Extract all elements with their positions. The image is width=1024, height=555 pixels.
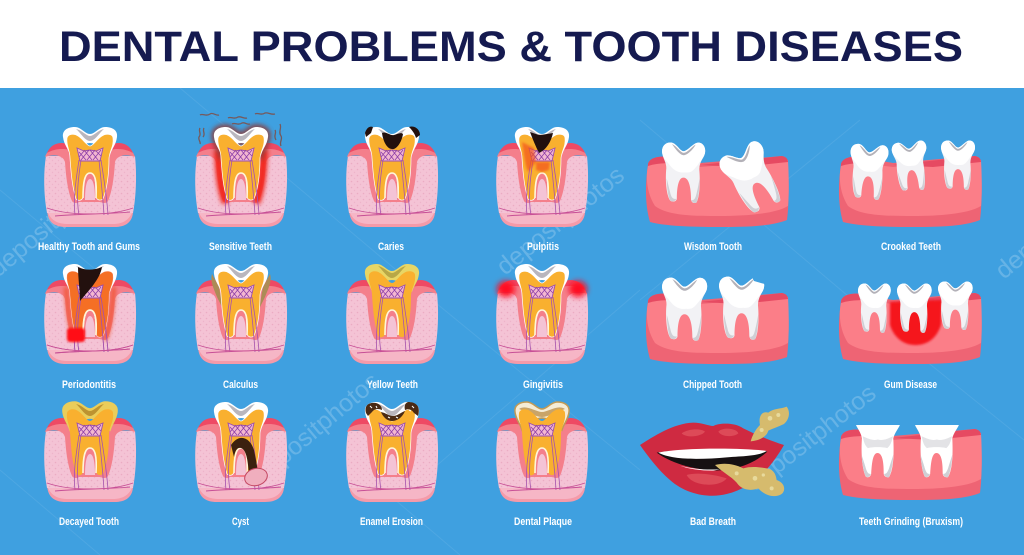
icon: cavity: [78, 267, 102, 301]
icon: mouth and teeth: [657, 449, 767, 471]
title: DENTAL PROBLEMS & TOOTH DISEASES: [59, 23, 963, 71]
icon: impacted tooth: [716, 138, 789, 219]
label: Bad Breath: [690, 516, 736, 528]
watermark text: depositphotos: [491, 161, 630, 281]
icon: infected root: [231, 438, 258, 475]
icon: cavity: [530, 132, 553, 153]
icon: eroded enamel: [366, 402, 419, 421]
panel: gingivitis: [496, 264, 588, 391]
label: Dental Plaque: [514, 516, 572, 528]
icon: lips: [640, 423, 784, 496]
label: Teeth Grinding (Bruxism): [859, 516, 963, 528]
label: Enamel Erosion: [360, 516, 423, 528]
label: Sensitive Teeth: [209, 241, 272, 253]
panel: calculus: [195, 264, 287, 391]
panel: caries: [346, 126, 438, 253]
panel: bad breath: [640, 407, 789, 528]
watermark text: depositphotos: [741, 379, 881, 497]
panel: wisdom tooth: [646, 138, 789, 253]
label: Cyst: [232, 516, 249, 528]
panel: enamel erosion: [346, 402, 438, 528]
panel: crooked teeth: [839, 140, 982, 253]
label: Decayed Tooth: [59, 516, 119, 528]
label: Pulpitis: [527, 241, 559, 253]
panel: teeth grinding: [839, 425, 982, 528]
label: Gum Disease: [884, 379, 937, 391]
icon: sensitivity waves: [199, 113, 282, 146]
panel: healthy tooth and gums: [38, 127, 140, 253]
icon: inflamed gum: [890, 300, 942, 345]
header band: [0, 0, 1024, 88]
panel: gum disease: [839, 281, 982, 391]
label: Chipped Tooth: [683, 379, 742, 391]
label: Caries: [378, 241, 404, 253]
label: Healthy Tooth and Gums: [38, 241, 140, 253]
panel: yellow teeth: [346, 264, 438, 391]
label: Calculus: [223, 379, 258, 391]
label: Periodontitis: [62, 379, 116, 391]
icon: abscess: [67, 328, 85, 342]
icon: inflamed gums: [497, 281, 587, 297]
panel: cyst: [195, 402, 287, 528]
label: Wisdom Tooth: [684, 241, 742, 253]
label: Crooked Teeth: [881, 241, 941, 253]
label: Gingivitis: [523, 379, 563, 391]
panel: pulpitis: [496, 127, 588, 253]
label: Yellow Teeth: [367, 379, 418, 391]
watermark text: depositphotos: [248, 367, 385, 489]
panel: dental plaque: [496, 402, 588, 528]
panel: sensitive teeth: [195, 113, 287, 253]
icon: odor clouds: [751, 407, 789, 441]
icon: cavity: [365, 126, 420, 149]
icon: chip: [750, 273, 768, 285]
panel: chipped tooth: [646, 273, 789, 391]
icon: tartar: [211, 274, 271, 309]
panel: periodontitis: [44, 264, 136, 391]
icon: cyst: [243, 466, 269, 488]
panel: decayed tooth: [44, 402, 136, 528]
